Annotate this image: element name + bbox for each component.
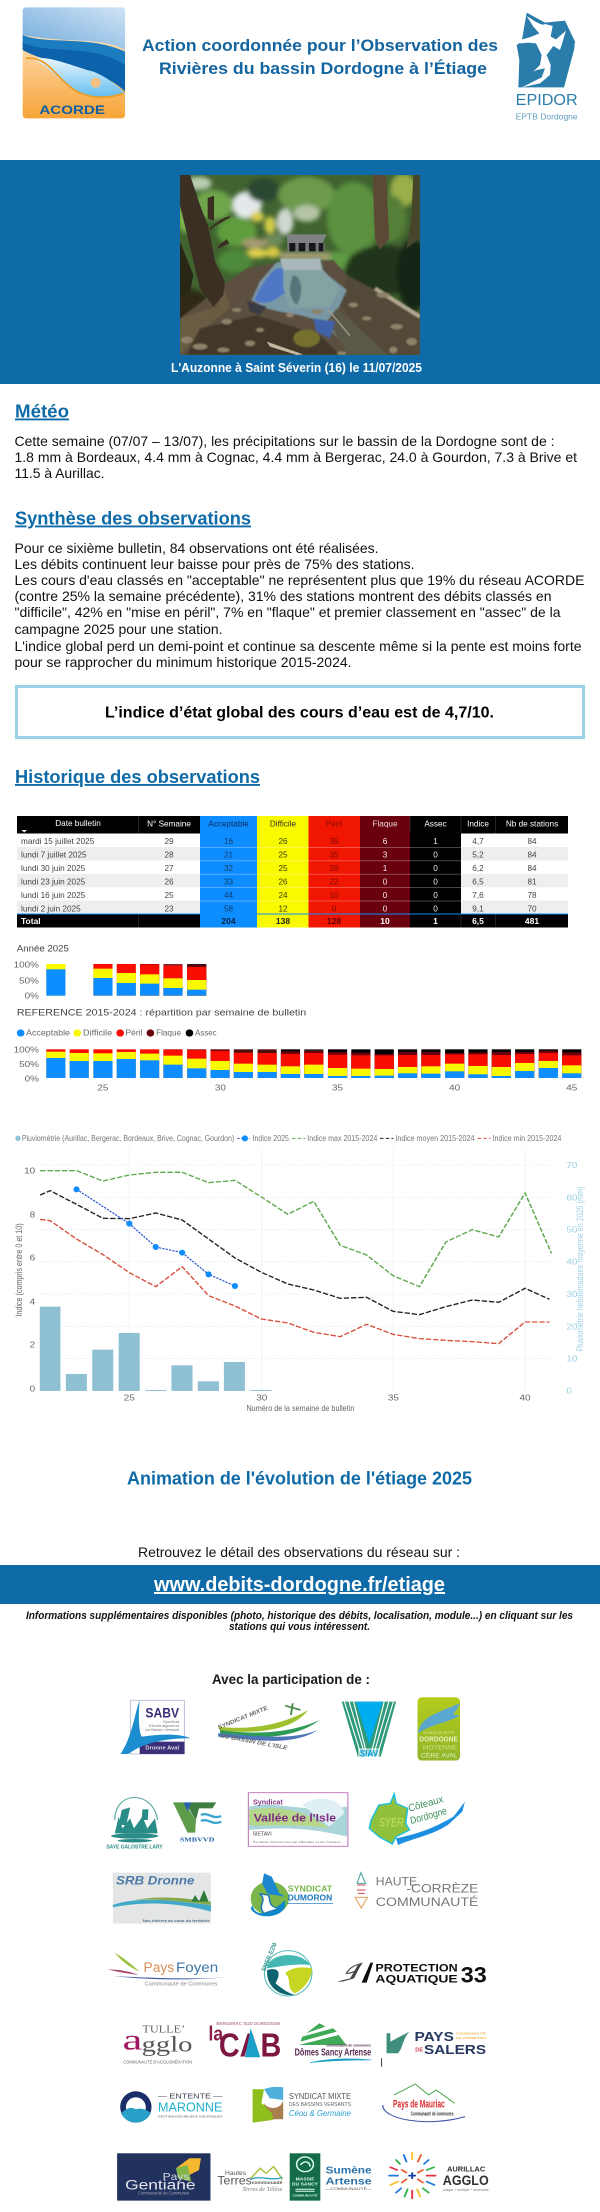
logo: Hautes Terres: Terres de Télèse — [242, 2186, 282, 2193]
callout: indice global: L’indice d’état global des cours d’eau est de 4,7/10. — [105, 704, 494, 722]
table total row: 481 — [525, 916, 539, 926]
logo: Vallée de l'Isle: Syndicat Intercommunal d'Études et de Travaux — [253, 1839, 341, 1844]
logo: Dômes Sancy Artense: communauté de communes — [326, 2043, 372, 2047]
table header row: Difficile — [270, 820, 297, 828]
logo: Haute-Corrèze Communauté: COMMUNAUTÉ — [376, 1895, 479, 1909]
logo: Dordogne moyenne Cère aval: CÈRE AVAL — [421, 1751, 458, 1759]
logo: SRB Dronne: Nos rivières au cœur du territoire — [143, 1918, 211, 1923]
gridlines and axes: 10 — [566, 1354, 577, 1364]
table rows: 22 — [329, 878, 339, 886]
logo: Vallée de l'Isle: SIETAVI — [253, 1832, 272, 1838]
logo: syndicat mixte du bassin de l'Isle — [217, 1703, 320, 1752]
logo: la CAB — [209, 2021, 281, 2064]
table rows: 33 — [224, 878, 233, 886]
logo: Céou et Germaine: SYNDICAT MIXTE — [289, 2092, 351, 2101]
logo: Sumène Artense: —COMMUNAUTÉ— — [325, 2186, 372, 2191]
text: precipitation — [14, 433, 577, 481]
table rows: mardi 15 juillet 2025 — [21, 837, 95, 846]
chart: stacked bars reference: 35 — [332, 1083, 343, 1093]
table rows: 0 — [383, 904, 388, 914]
gridlines and axes: 30 — [566, 1290, 577, 1299]
logo: Hautes Terres: communauté — [252, 2180, 283, 2185]
logo: Pays de Mauriac: Pays de Mauriac — [393, 2099, 445, 2110]
table total row: 1 — [433, 916, 438, 926]
table rows: 81 — [527, 878, 537, 886]
logo: Pays Foyen — [108, 1953, 226, 1988]
text: synthèse — [14, 540, 584, 670]
logo: Saye Galostre Lary — [106, 1797, 163, 1851]
table rows: 5,2 — [472, 850, 484, 860]
logo: Pays Gentiane: Communauté de Communes — [138, 2191, 190, 2196]
table rows: 0 — [433, 864, 438, 873]
logo: Dômes Sancy Artense: Dômes Sancy Artense — [295, 2047, 371, 2058]
gridlines and axes: Indice (compris entre 0 et 10) — [13, 1223, 24, 1317]
logo: SABV — [121, 1700, 191, 1754]
logo: Coteaux de Dordogne: Côteaux — [407, 1794, 446, 1814]
table rows: 35 — [329, 837, 339, 846]
table rows: lundi 23 juin 2025 — [21, 878, 86, 886]
table rows — [21, 837, 537, 914]
text: precipitation: 11.5 à Aurillac. — [14, 465, 104, 481]
logo: la CAB: la — [209, 2023, 224, 2045]
text: precipitation: Cette semaine (07/07 – 13/07), les précipitations sur le bassin de la Dordogne sont de : — [14, 433, 554, 449]
table rows: 84 — [527, 837, 537, 846]
header — [23, 7, 578, 121]
rainfall bars — [40, 1307, 271, 1391]
table rows: 10 — [329, 891, 339, 900]
chart: stacked bars reference: 50% — [19, 1060, 39, 1069]
chart: stacked bars reference: 40 — [449, 1083, 460, 1093]
photo caption: L'Auzonne à Saint Séverin (16) le 11/07/2025 — [171, 360, 422, 375]
logo: Pays Gentiane: Gentiane — [125, 2177, 196, 2193]
table rows: 26 — [164, 878, 174, 886]
logo: ACORDE — [23, 7, 125, 118]
logo: Pays de Salers: DE — [415, 2048, 424, 2053]
text: synthèse: campagne 2025 pour une station. — [14, 621, 222, 637]
logo: SIAV: SIAV — [360, 1749, 378, 1759]
logo: Massif du Sancy: COMMUNAUTÉ — [292, 2193, 319, 2198]
chart: stacked bars reference: 25 — [97, 1083, 108, 1093]
gridlines and axes: 70 — [566, 1161, 577, 1170]
logo: Syndicat du Moron — [251, 1873, 333, 1916]
table header row: Flaque — [372, 820, 398, 828]
logo: SRB Dronne — [113, 1873, 211, 1924]
table rows: 6,5 — [472, 878, 484, 886]
gridlines and axes: 8 — [30, 1210, 35, 1219]
section: Météo — [14, 400, 577, 481]
logo: Entente Maronne — [120, 2091, 223, 2123]
table header row: Nb de stations — [506, 820, 558, 828]
text: synthèse: L'indice global perd un demi-point et continue sa descente même si la pente est moins forte — [14, 638, 582, 654]
table rows: 0 — [433, 904, 438, 914]
text: informations supplémentaires — [26, 1610, 573, 1633]
table: historique des bulletins — [17, 816, 568, 928]
table total row: Total — [21, 916, 41, 926]
logo: Aurillac Agglo: AGGLO — [443, 2173, 489, 2189]
title: Rivières du bassin Dordogne à l’Étiage — [159, 59, 487, 78]
table total row: 6,5 — [472, 916, 484, 926]
logo: Protection Aquatique 33 — [337, 1961, 487, 1988]
table rows: 26 — [278, 837, 288, 846]
heading: Année 2025: Année 2025 — [17, 944, 69, 954]
logo: Dordogne moyenne Cère aval: MOYENNE — [423, 1744, 458, 1751]
gridlines and axes — [13, 1148, 585, 1413]
logo: Sumène Artense: Artense — [326, 2176, 372, 2187]
legend: classes: Difficile — [83, 1028, 112, 1038]
gridlines and axes: Numéro de la semaine de bulletin — [246, 1404, 354, 1413]
table rows: 29 — [164, 837, 174, 846]
logo: Pays Gentiane — [117, 2153, 210, 2201]
chart: stacked bars reference: 45 — [566, 1083, 577, 1093]
logo: syndicat mixte du bassin de l'Isle: DU BASSIN DE L'ISLE — [220, 1733, 289, 1752]
chart legend — [15, 1134, 561, 1143]
logo: Pays de Salers: DE COMMUNES — [456, 2036, 487, 2040]
heading: participation: Avec la participation de : — [212, 1671, 370, 1687]
banner: site web: www.debits-dordogne.fr/etiage — [153, 1574, 445, 1596]
logo: EPIDOR: EPTB Dordogne — [516, 112, 578, 121]
logo: SMER E2M: SMER-E2M — [260, 1942, 279, 1972]
table rows: 4,7 — [472, 837, 484, 846]
line: indice min — [40, 1219, 550, 1344]
table rows: 9,1 — [472, 904, 484, 914]
table rows: 6 — [383, 837, 388, 846]
logo: ACORDE: ACORDE — [39, 103, 105, 117]
logo: Vallée de l'Isle — [248, 1793, 348, 1846]
logo: Coteaux de Dordogne: SYER — [379, 1816, 404, 1829]
legend: classes: Acceptable — [26, 1028, 70, 1038]
logo: Vallée de l'Isle: Vallée de l'Isle — [254, 1813, 336, 1824]
logo: Massif du Sancy — [290, 2153, 320, 2201]
logo: SIAV — [342, 1702, 396, 1759]
partner logos rows 2 to 7 — [106, 1793, 489, 2201]
logo: Tulle agglo — [122, 2022, 192, 2064]
photo: L'Auzonne à Saint Séverin — [180, 175, 420, 355]
logo: Protection Aquatique 33: PROTECTION — [375, 1961, 458, 1974]
logo: EPIDOR — [516, 13, 578, 121]
logo: Aurillac Agglo: AURILLAC — [447, 2165, 486, 2173]
logo: Hautes Terres — [217, 2167, 283, 2193]
logo: Céou et Germaine: Céou & Germaine — [289, 2109, 351, 2118]
heading: Météo: Météo — [15, 400, 69, 422]
table rows: 25 — [278, 850, 288, 860]
table rows: 25 — [278, 864, 288, 873]
logo: EPIDOR: EPIDOR — [516, 92, 578, 109]
logo: Aurillac Agglo: unique + multiple + ensemble — [443, 2188, 489, 2192]
gridlines and axes: 60 — [566, 1193, 577, 1202]
logo: SABV: d'Aménagement — [149, 1723, 180, 1728]
callout: indice global — [16, 686, 584, 738]
gridlines and axes: 35 — [388, 1393, 399, 1402]
table rows: 84 — [527, 864, 537, 873]
logo: Tulle agglo: a — [122, 2022, 142, 2056]
logo: Sumène Artense: Sumène — [326, 2165, 372, 2176]
table rows: 26 — [278, 878, 288, 886]
logo: Pays de Salers: COMMUNAUTÉ — [456, 2031, 487, 2035]
heading: animation: Animation de l'évolution de l'étiage 2025 — [127, 1468, 472, 1488]
table rows: lundi 30 juin 2025 — [21, 864, 86, 873]
gridlines and axes: Pluviométrie hebdomadaire moyenne en 2025 (mm) — [575, 1187, 585, 1352]
logo: Entente Maronne: MARONNE — [158, 2100, 222, 2114]
logo: SMER E2M — [260, 1942, 312, 1996]
gridlines and axes: 40 — [566, 1257, 577, 1267]
chart: stacked bars reference: 30 — [215, 1083, 226, 1093]
table total row: 10 — [380, 916, 390, 926]
logo: Coteaux de Dordogne: Dordogne — [408, 1806, 449, 1827]
logo: Dordogne moyenne Cère aval: DORDOGNE — [419, 1735, 458, 1743]
gridlines and axes: 2 — [30, 1340, 35, 1350]
gridlines and axes: 0 — [30, 1384, 35, 1393]
table rows: lundi 2 juin 2025 — [21, 904, 81, 914]
table rows: 70 — [527, 904, 537, 914]
table rows: 6,2 — [472, 864, 484, 873]
line: indice 2025 — [73, 1186, 238, 1289]
chart: stacked bars reference: 100% — [14, 1045, 39, 1054]
logo: SABV: du Bassin Versant — [145, 1727, 180, 1732]
logo: Tulle agglo: TULLE’ — [142, 2022, 185, 2035]
logo: Hautes Terres: Hautes — [225, 2169, 246, 2177]
logo: Syndicat du Moron: SYNDICAT — [288, 1884, 332, 1894]
table rows: 1 — [433, 837, 438, 846]
chart legend: Indice moyen 2015-2024 — [395, 1134, 475, 1143]
table rows: 25 — [164, 891, 174, 900]
chart legend: Indice 2025 — [253, 1134, 289, 1143]
logo: Céou et Germaine: DES BASSINS VERSANTS — [289, 2102, 351, 2108]
legend: classes: Assec — [195, 1028, 217, 1038]
gridlines and axes: 0 — [566, 1386, 572, 1395]
table rows: 12 — [278, 904, 288, 914]
logo: Vallée de l'Isle: Syndicat — [253, 1798, 283, 1806]
logo: syndicat mixte du bassin de l'Isle: SYNDICAT MIXTE — [217, 1705, 270, 1731]
table rows: 32 — [224, 864, 233, 873]
logo: Aurillac Agglo — [389, 2153, 489, 2198]
legend: classes: Flaque — [156, 1028, 181, 1038]
table header row: Péril — [326, 820, 342, 828]
table rows: lundi 7 juillet 2025 — [21, 850, 87, 860]
chart legend: Indice max 2015-2024 — [307, 1134, 377, 1143]
table rows: 84 — [527, 850, 537, 860]
chart legend: Pluviométrie (Aurillac, Bergerac, Bordeaux, Brive, Cognac, Gourdon) — [22, 1134, 234, 1143]
logo: Haute-Corrèze Communauté: HAUTE — [376, 1875, 417, 1888]
logo: Protection Aquatique 33: 33 — [461, 1964, 487, 1988]
section: Synthèse des observations — [14, 508, 584, 670]
table rows: 28 — [164, 850, 174, 860]
partner logos row 1 — [121, 1697, 460, 1761]
table total row: 128 — [327, 916, 341, 926]
logo: Pays de Salers: SALERS — [424, 2043, 486, 2057]
title — [142, 36, 498, 78]
chart: stacked bars reference: 0% — [25, 1074, 39, 1084]
table header row: Assec — [424, 820, 447, 828]
logo: Dordogne moyenne Cère aval — [418, 1697, 460, 1761]
logo: Massif du Sancy: DU SANCY — [292, 2182, 319, 2187]
logo: Pays Foyen: Communauté de Communes — [145, 1982, 217, 1988]
heading: référence 2015-2024: REFERENCE 2015-2024 : répartition par semaine de bulletin — [17, 1008, 306, 1018]
table total row: 138 — [276, 916, 290, 926]
logo: Coteaux de Dordogne — [369, 1794, 465, 1845]
logo: Haute-Corrèze Communauté: -CORRÈZE — [406, 1882, 479, 1895]
text: synthèse: Les débits continuent leur baisse pour près de 75% des stations. — [14, 556, 414, 572]
table header row: Indice — [467, 820, 489, 828]
gridlines and axes: 50 — [566, 1225, 577, 1235]
text: retrouvez le détail: Retrouvez le détail des observations du réseau sur : — [138, 1544, 460, 1560]
table rows: lundi 16 juin 2025 — [21, 891, 86, 900]
logo: Entente Maronne: — ENTENTE — — [158, 2092, 222, 2100]
chart: stacked bars 2025: 50% — [19, 976, 39, 985]
logo: Protection Aquatique 33: AQUATIQUE — [375, 1972, 458, 1985]
gridlines and axes: 30 — [256, 1393, 267, 1402]
banner with photo — [0, 160, 600, 384]
text: informations supplémentaires: stations qui vous intéressent. — [229, 1621, 370, 1633]
table header row: Date bulletin — [55, 819, 101, 828]
banner: site web — [0, 1565, 600, 1604]
title: Action coordonnée pour l’Observation des — [142, 36, 498, 55]
table rows: 21 — [224, 850, 233, 860]
table rows: 35 — [329, 850, 339, 860]
logo: Saye Galostre Lary: SAYE GALOSTRE LARY — [106, 1845, 163, 1851]
text: precipitation: 1.8 mm à Bordeaux, 4.4 mm à Cognac, 4.4 mm à Bergerac, 24.0 à Gourdon, 7.3 à Brive et — [14, 449, 577, 465]
table total row: 204 — [221, 916, 236, 926]
gridlines and axes: 40 — [520, 1393, 531, 1402]
table rows: 44 — [224, 891, 233, 900]
logo: Dordogne moyenne Cère aval: SYNDICAT MIXTE — [423, 1731, 455, 1735]
logo: Sumène Artense — [325, 2165, 372, 2191]
text: synthèse: pour se rapprocher du minimum historique 2015-2024. — [14, 654, 352, 670]
table rows: 78 — [527, 891, 537, 900]
table rows: 0 — [383, 878, 388, 886]
table rows: 0 — [332, 904, 337, 914]
logo: SMBVVD: SMBVVD — [180, 1836, 214, 1843]
table rows: 26 — [329, 864, 339, 873]
text: synthèse: "difficile", 42% en "mise en péril", 7% en "flaque" et premier classement en "assec" de la — [14, 604, 561, 620]
logo: Pays de Mauriac — [383, 2084, 465, 2122]
logo: Tulle agglo: gglo — [142, 2033, 192, 2057]
logo: Hautes Terres: Terres — [217, 2173, 252, 2187]
logo: SRB Dronne: SRB Dronne — [116, 1874, 194, 1887]
table total row — [21, 916, 539, 926]
logo: Tulle agglo: COMMUNAUTÉ D'AGGLOMÉRATION — [123, 2059, 192, 2064]
logo: Pays de Mauriac: Communauté de communes — [411, 2112, 453, 2117]
line: indice moyen — [40, 1191, 550, 1315]
logo: Haute-Corrèze Communauté — [355, 1873, 479, 1909]
text: informations supplémentaires: Informations supplémentaires disponibles (photo, historique des débits, localisation, module...) en cliquant sur les — [26, 1610, 573, 1622]
logo: Pays Gentiane: Pays — [163, 2172, 189, 2183]
chart: stacked bars reference — [14, 1045, 581, 1093]
logo: Pays Foyen: Foyen — [176, 1960, 218, 1976]
chart: stacked bars 2025: 100% — [14, 960, 39, 969]
logo: SABV: SABV — [145, 1705, 179, 1721]
text: synthèse: Les cours d'eau classés en "acceptable" ne représentent plus que 19% du réseau ACORDE — [14, 572, 584, 588]
logo: Syndicat du Moron: DUMORON — [288, 1893, 332, 1903]
heading: Historique des observations: Historique des observations — [15, 766, 260, 787]
chart group: répartition par semaine — [14, 944, 581, 1093]
table rows: 0 — [433, 891, 438, 900]
logo: SABV: Syndicat — [163, 1719, 180, 1724]
table rows: 7,6 — [472, 891, 484, 900]
table rows: 0 — [383, 891, 388, 900]
gridlines and axes: 10 — [24, 1166, 35, 1176]
gridlines and axes: 6 — [30, 1253, 35, 1263]
legend: classes: Péril — [126, 1028, 142, 1038]
table rows: 1 — [383, 864, 388, 873]
logo: la CAB: CAB — [219, 2027, 281, 2064]
table rows: 16 — [224, 837, 233, 846]
table rows: 0 — [433, 878, 438, 886]
table header row: Acceptable — [208, 820, 249, 828]
logo: SMBVVD — [173, 1802, 221, 1843]
legend: classes — [17, 1028, 217, 1038]
heading: Synthèse: Synthèse des observations — [15, 508, 251, 528]
table rows: 58 — [224, 904, 233, 914]
gridlines and axes: 20 — [566, 1322, 577, 1331]
chart: indice et pluviométrie — [13, 1134, 585, 1413]
table rows: 3 — [383, 850, 388, 860]
logo: Pays de Salers — [387, 2030, 487, 2057]
text: synthèse: Pour ce sixième bulletin, 84 observations ont été réalisées. — [14, 540, 378, 556]
logo: Dômes Sancy Artense — [295, 2023, 372, 2063]
table rows: 24 — [278, 891, 288, 900]
gridlines and axes: 25 — [124, 1393, 135, 1402]
chart: stacked bars 2025: 0% — [25, 991, 39, 1001]
logo: Céou et Germaine — [253, 2087, 351, 2123]
line: indice max — [40, 1171, 551, 1287]
table rows: 23 — [164, 904, 174, 914]
gridlines and axes: 4 — [30, 1297, 35, 1306]
logo: Entente Maronne: GESTION DES MILIEUX AQUATIQUES — [158, 2115, 223, 2118]
logo: la CAB: BERGERAC SUD DORDOGNE — [216, 2021, 281, 2026]
logo: Pays de Salers: PAYS — [414, 2030, 454, 2044]
table header row: N° Semaine — [147, 820, 191, 828]
table rows: 27 — [164, 864, 174, 873]
table header row — [22, 819, 558, 832]
chart legend: Indice min 2015-2024 — [493, 1134, 561, 1143]
text: synthèse: (contre 25% la semaine précédente), 31% des stations montrent des débits classés en — [14, 588, 552, 604]
logo: Massif du Sancy: MASSIF — [296, 2177, 315, 2182]
chart: stacked bars 2025 — [14, 960, 206, 1001]
table rows: 0 — [433, 850, 438, 860]
logo: SABV: Dronne Aval — [145, 1746, 180, 1751]
logo: Pays Foyen: Pays — [144, 1960, 174, 1976]
